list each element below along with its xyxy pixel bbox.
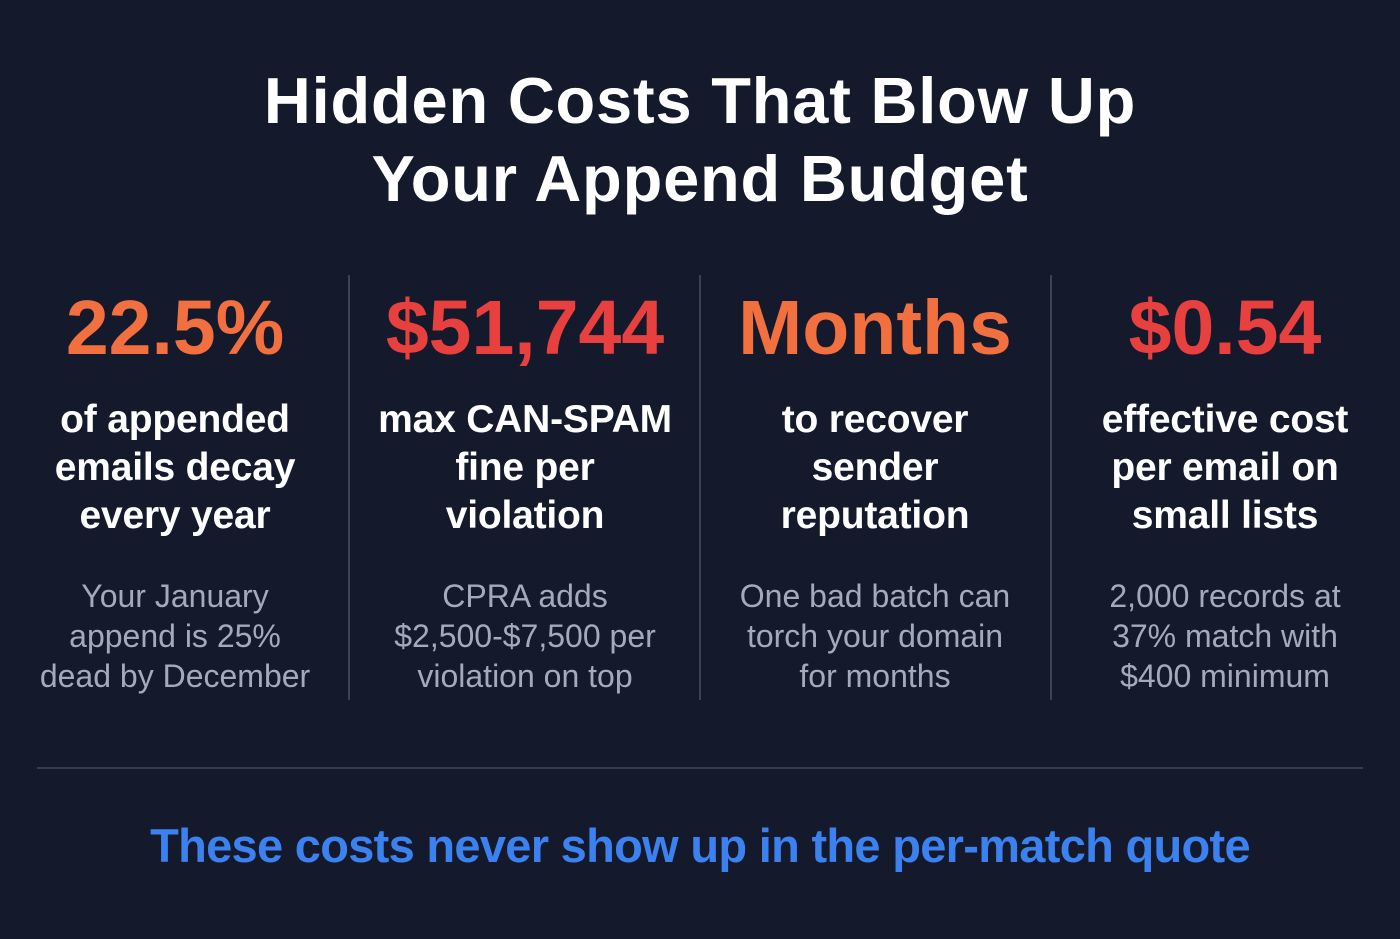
label: cost: per email on (1111, 446, 1339, 489)
note: reputation: torch your domain (747, 618, 1003, 654)
label: decay: of appended (60, 398, 290, 441)
note: fine (394, 578, 656, 694)
label: fine (378, 398, 672, 537)
note: fine: CPRA adds (442, 578, 608, 614)
stat: $0.54: $0.54 (1129, 285, 1321, 371)
label: decay: emails decay (55, 446, 295, 489)
stat: 22.5%: 22.5% (66, 285, 284, 371)
stat: Months: Months (738, 285, 1012, 371)
note: cost: 37% match with (1112, 618, 1338, 654)
label: decay (55, 398, 296, 537)
note: reputation (740, 578, 1010, 694)
footer callout: These costs never show up in the per-match quote (150, 819, 1250, 872)
label: fine: fine per (455, 446, 595, 489)
column: decay (40, 285, 310, 694)
note: cost: $400 minimum (1120, 658, 1330, 694)
note: cost: 2,000 records at (1109, 578, 1341, 614)
label: reputation: sender (812, 446, 938, 489)
column: cost per email (1102, 285, 1348, 694)
label: cost: effective cost (1102, 398, 1348, 441)
label: reputation: to recover (782, 398, 968, 441)
title: Hidden Costs That Blow Up (264, 64, 1136, 137)
column: fine (378, 285, 672, 694)
label: cost (1102, 398, 1348, 537)
note: fine: violation on top (417, 658, 633, 694)
title: Your Append Budget (371, 142, 1029, 215)
label: fine: max CAN-SPAM (378, 398, 672, 441)
label: fine: violation (446, 494, 604, 537)
note: reputation: One bad batch can (740, 578, 1010, 614)
note: decay: dead by December (40, 658, 310, 694)
title (264, 64, 1136, 215)
note: reputation: for months (799, 658, 951, 694)
stat: $51,744: $51,744 (386, 285, 664, 371)
label: reputation (781, 398, 969, 537)
note: cost (1109, 578, 1341, 694)
note: decay: append is 25% (69, 618, 281, 654)
note: decay (40, 578, 310, 694)
note: decay: Your January (81, 578, 269, 614)
column: reputation (738, 285, 1012, 694)
label: cost: small lists (1132, 494, 1318, 537)
label: reputation: reputation (781, 494, 969, 537)
label: decay: every year (79, 494, 271, 537)
note: fine: $2,500-$7,500 per (394, 618, 656, 654)
